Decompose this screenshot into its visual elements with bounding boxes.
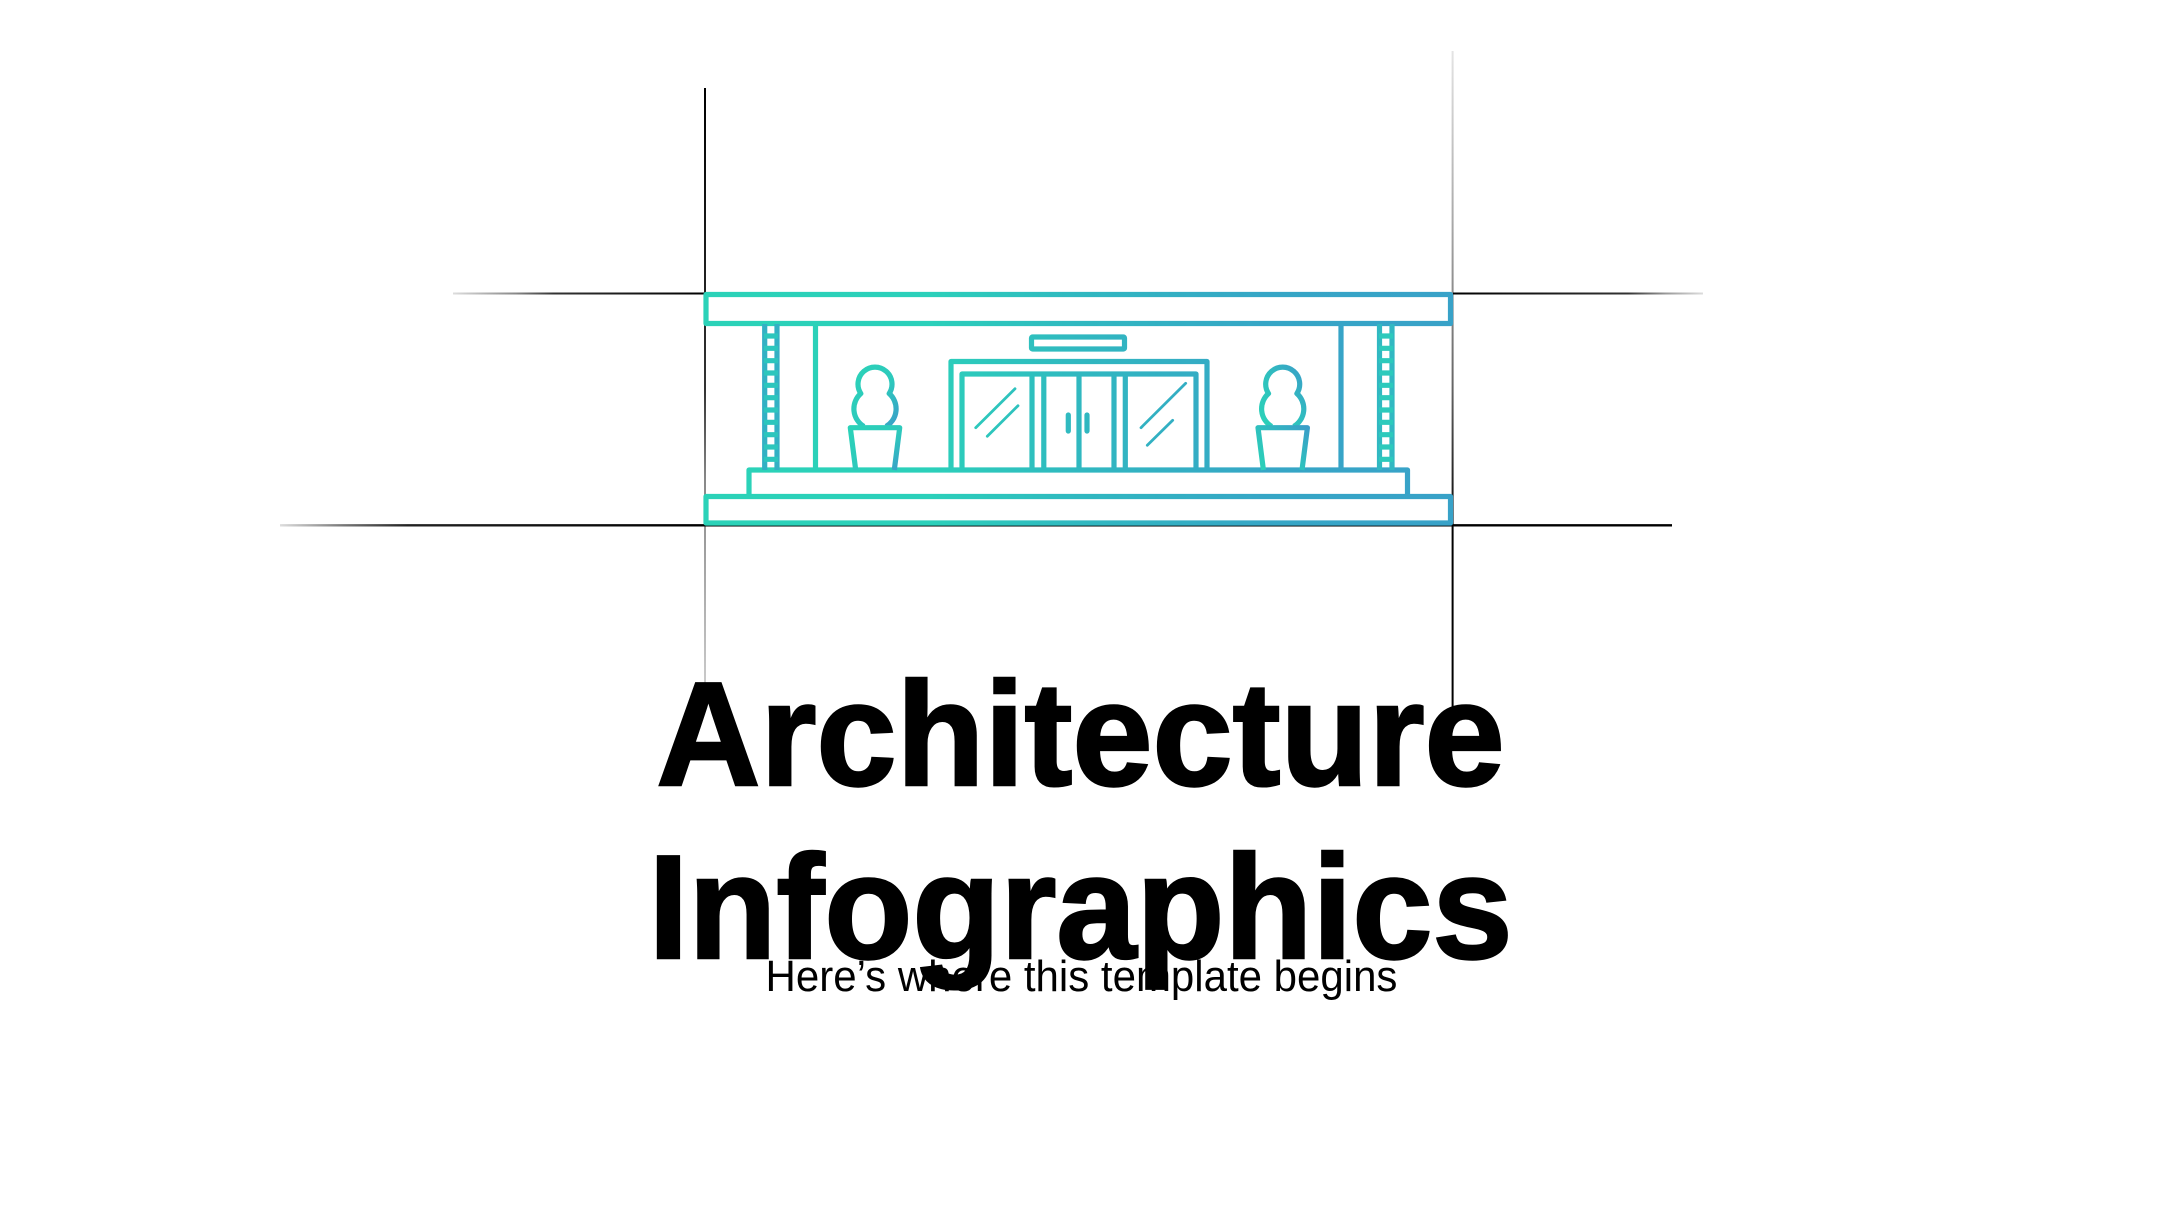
- entrance sign: [1032, 337, 1124, 349]
- wall lines: [816, 324, 1341, 470]
- subtitle: Here’s where this template begins: [766, 951, 1397, 1000]
- door handles: [1068, 415, 1087, 431]
- left potted plant: [850, 367, 900, 470]
- door frame: [951, 362, 1207, 470]
- left ladder column: [764, 324, 778, 470]
- right ladder column: [1379, 324, 1393, 470]
- window glare: [976, 383, 1186, 445]
- right potted plant: [1258, 367, 1307, 470]
- title line 2: Infographics: [648, 824, 1513, 989]
- base slab: [706, 496, 1450, 523]
- roof beam: [706, 294, 1450, 324]
- title line 1: Architecture: [656, 652, 1505, 817]
- building storefront: [706, 294, 1450, 523]
- construction guide lines: [280, 51, 1703, 720]
- step: [749, 470, 1408, 496]
- door panels: [962, 374, 1196, 470]
